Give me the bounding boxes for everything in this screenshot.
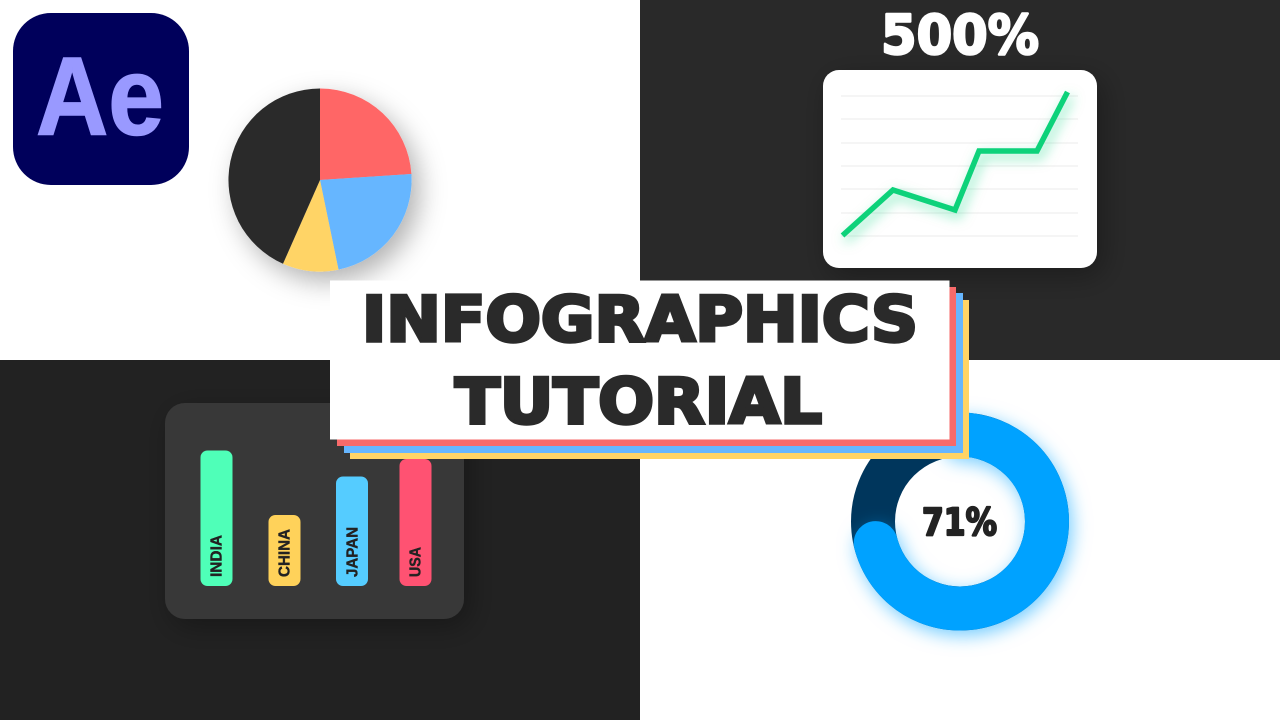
bar: USA xyxy=(400,459,432,586)
donut value: 71% xyxy=(922,501,997,544)
title layer: blue xyxy=(344,293,963,453)
background: top-right dark quadrant xyxy=(640,0,1280,360)
panel: bar chart xyxy=(165,403,464,619)
bar: Japan: JAPAN xyxy=(344,527,362,577)
icon: After Effects logo: Ae xyxy=(36,34,164,158)
bar: China: CHINA xyxy=(276,529,294,577)
donut arc: 71% xyxy=(876,434,1047,608)
bar: USA: USA xyxy=(408,547,424,577)
chart line: green trend xyxy=(842,92,1068,236)
title line 1: INFOGRAPHICS xyxy=(362,283,918,356)
bar: India: INDIA xyxy=(208,535,226,577)
background: bottom-left dark quadrant xyxy=(0,360,640,720)
pie chart xyxy=(228,88,412,271)
title card xyxy=(330,280,969,459)
panel: line chart xyxy=(823,70,1097,268)
title layer: white xyxy=(330,280,950,440)
bar: India xyxy=(200,450,232,586)
donut chart xyxy=(873,434,1047,608)
icon: After Effects logo xyxy=(13,13,189,185)
title line 2: TUTORIAL xyxy=(455,365,822,438)
bar: China xyxy=(268,515,300,586)
bar: Japan xyxy=(336,476,368,586)
heading: 500%: 500% xyxy=(881,4,1039,66)
title layer: red xyxy=(337,287,956,446)
title layer: yellow xyxy=(350,300,969,459)
